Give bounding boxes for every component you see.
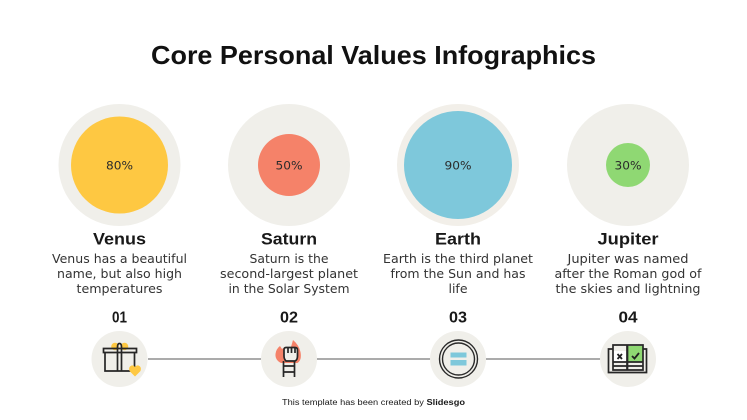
step numbers: 02 (280, 310, 298, 326)
Jupiter progress circle (567, 104, 689, 226)
footer credit: This template has been created by Slidesgo (282, 398, 465, 407)
step numbers: 04 (618, 310, 638, 326)
Earth description: Earth is the third planet (383, 252, 533, 266)
Earth heading: Earth (435, 230, 481, 248)
Venus description: temperatures (76, 282, 162, 296)
Saturn progress circle: 50% (276, 158, 303, 172)
step numbers: 03 (449, 310, 467, 326)
Earth description: life (448, 282, 468, 296)
Venus description: Venus has a beautiful (52, 252, 187, 266)
Earth progress circle (397, 104, 519, 226)
Venus description: name, but also high (57, 267, 182, 281)
Venus progress circle (58, 104, 180, 226)
Jupiter description (554, 252, 702, 296)
step numbers (112, 310, 638, 326)
Jupiter description: Jupiter was named (566, 252, 688, 266)
Earth description (383, 252, 533, 296)
Jupiter description: the skies and lightning (556, 282, 700, 296)
Jupiter progress circle: 30% (614, 158, 642, 172)
Venus progress circle: 80% (106, 158, 133, 172)
Venus heading: Venus (93, 230, 146, 248)
Saturn description (220, 252, 358, 296)
Saturn description: second-largest planet (220, 267, 358, 281)
Saturn description: in the Solar System (228, 282, 350, 296)
icon: gift box (92, 331, 148, 387)
icon: equals sign in double ring (430, 331, 486, 387)
Saturn progress circle (228, 104, 350, 226)
panel: Jupiter (554, 104, 702, 296)
Jupiter heading: Jupiter (598, 230, 659, 248)
panel: Earth (383, 104, 533, 296)
Jupiter description: after the Roman god of (554, 267, 702, 281)
panel: Venus (52, 104, 187, 296)
step numbers: 01 (112, 310, 127, 326)
title: Core Personal Values Infographics (151, 40, 596, 70)
Earth progress circle: 90% (444, 158, 472, 172)
timeline connectors (148, 358, 600, 360)
icon: open book with cross and check (600, 331, 656, 387)
Saturn description: Saturn is the (250, 252, 328, 266)
icon: raised fist with flames (261, 331, 317, 387)
Venus description (52, 252, 187, 296)
Earth description: from the Sun and has (390, 267, 526, 281)
panel: Saturn (220, 104, 358, 296)
Saturn heading: Saturn (261, 230, 317, 248)
